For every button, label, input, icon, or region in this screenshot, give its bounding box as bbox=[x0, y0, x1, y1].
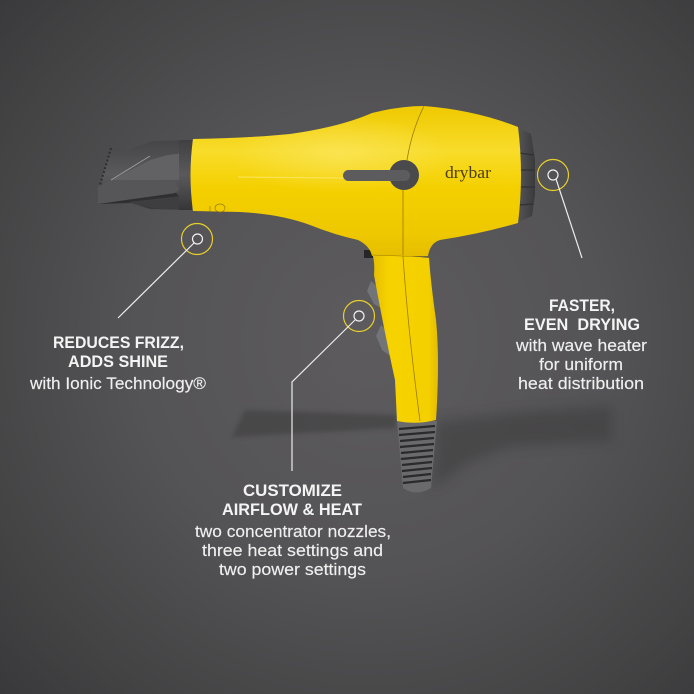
floor shadow bbox=[232, 406, 612, 490]
text: reduces frizz bbox=[29, 333, 206, 393]
power switch bbox=[343, 160, 419, 190]
cord boot bbox=[397, 421, 437, 492]
text: reduces frizz: ADDS SHINE bbox=[68, 352, 168, 371]
dryer body bbox=[190, 106, 521, 256]
control buttons bbox=[364, 250, 393, 358]
text: faster drying: EVEN DRYING bbox=[524, 315, 640, 334]
text: faster drying: for uniform bbox=[539, 356, 623, 374]
text: customize: two power settings bbox=[219, 561, 366, 579]
callout marker: airflow bbox=[292, 300, 374, 471]
text: faster drying bbox=[515, 296, 648, 393]
text: reduces frizz: REDUCES FRIZZ, bbox=[53, 333, 184, 352]
handle bbox=[372, 252, 438, 423]
text: customize bbox=[195, 481, 391, 579]
brand logo: drybar bbox=[445, 163, 491, 182]
callout marker: drying bbox=[538, 160, 582, 258]
seams bbox=[210, 106, 429, 421]
text: reduces frizz: with Ionic Technology® bbox=[29, 375, 206, 393]
callout marker: ionic bbox=[118, 224, 212, 318]
text: faster drying: with wave heater bbox=[515, 337, 648, 355]
text: faster drying: heat distribution bbox=[518, 375, 644, 393]
text: customize: two concentrator nozzles, bbox=[195, 523, 391, 541]
nozzle bbox=[98, 140, 192, 210]
rear grille bbox=[516, 127, 535, 223]
text: customize: CUSTOMIZE bbox=[243, 481, 342, 500]
text: customize: three heat settings and bbox=[202, 542, 383, 560]
text: customize: AIRFLOW & HEAT bbox=[222, 500, 363, 519]
body highlight bbox=[190, 106, 521, 240]
hair dryer bbox=[98, 106, 535, 492]
text: faster drying: FASTER, bbox=[549, 296, 615, 315]
